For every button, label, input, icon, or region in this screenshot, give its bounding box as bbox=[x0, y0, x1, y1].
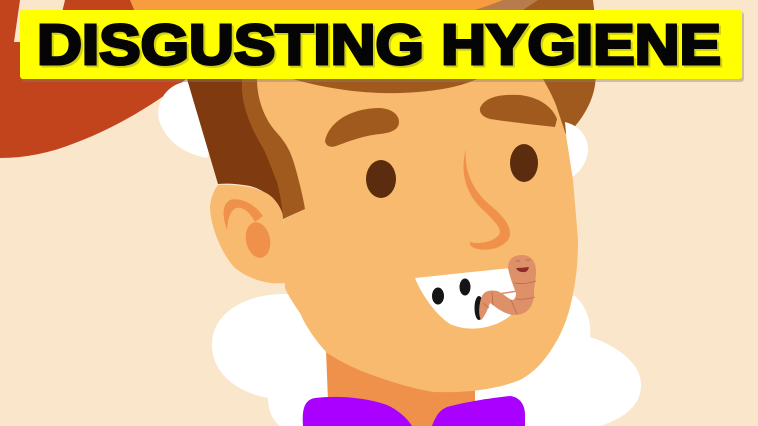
hair strip bbox=[242, 79, 305, 219]
worm segments bbox=[483, 281, 536, 314]
white collar bbox=[212, 294, 641, 426]
title banner bbox=[20, 10, 742, 79]
ear bbox=[210, 185, 300, 285]
worm strand bbox=[498, 291, 518, 294]
nose bbox=[463, 149, 510, 250]
title banner shadow bbox=[22, 12, 744, 82]
title shadow text: DISGUSTING HYGIENE bbox=[39, 15, 723, 79]
worm eyes bbox=[516, 260, 530, 261]
dark hair bbox=[187, 79, 320, 219]
purple bow tie bbox=[303, 396, 525, 426]
worm body bbox=[479, 255, 536, 320]
left eyebrow bbox=[325, 108, 399, 147]
ear inner bbox=[224, 199, 273, 260]
face bbox=[250, 79, 578, 392]
title text: DISGUSTING HYGIENE bbox=[37, 13, 721, 77]
worm smile bbox=[516, 267, 529, 272]
mouth bbox=[415, 268, 522, 329]
teeth gaps bbox=[432, 278, 484, 320]
right eye bbox=[510, 144, 538, 182]
worm bbox=[479, 255, 536, 320]
hair back bbox=[515, 0, 596, 135]
cream hat feather bbox=[14, 0, 65, 42]
hair fringe bbox=[293, 79, 477, 93]
red hat brim bbox=[0, 0, 200, 158]
orange hat bbox=[130, 0, 503, 12]
neck bbox=[326, 350, 475, 426]
left eye bbox=[366, 160, 396, 198]
hat shade bbox=[460, 0, 538, 12]
white wig left bbox=[158, 82, 225, 158]
white wig right bbox=[565, 122, 588, 178]
right eyebrow bbox=[480, 95, 557, 127]
